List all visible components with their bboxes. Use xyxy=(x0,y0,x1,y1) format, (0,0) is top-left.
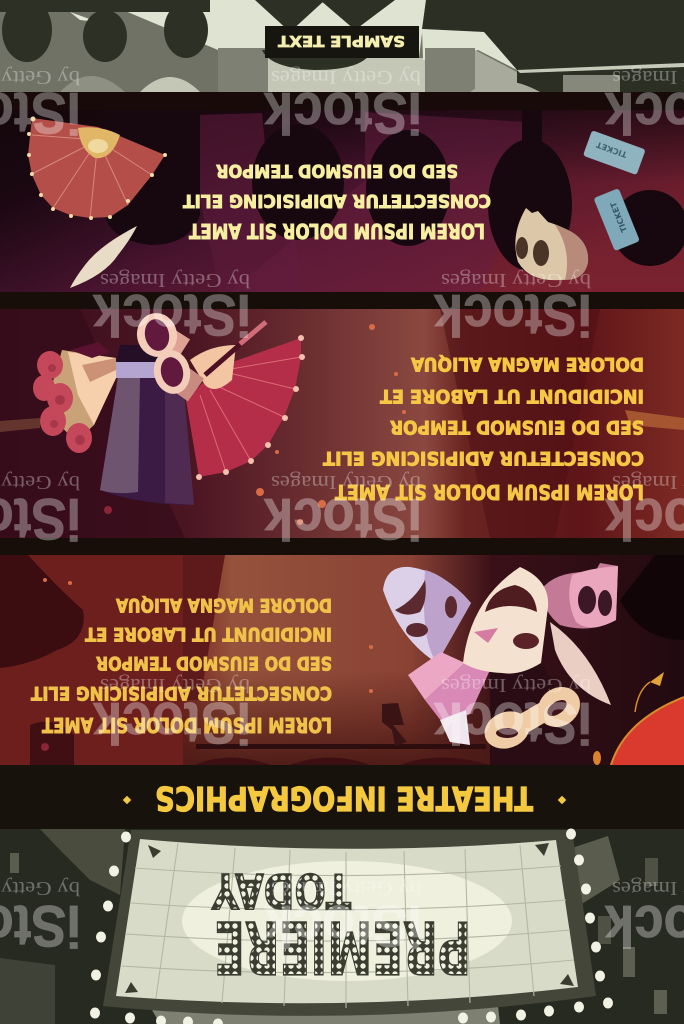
dust particles xyxy=(41,578,373,751)
icon: skull xyxy=(515,208,588,280)
watermark: repeated stock marks: iStock xyxy=(263,80,422,145)
text block: panel one copy: LOREM IPSUM DOLOR SIT AMET xyxy=(189,219,485,243)
icon: feather xyxy=(550,622,611,705)
bulbs around marquee xyxy=(90,828,613,1024)
text block: panel three copy: DOLORE MAGNA ALIQUA xyxy=(116,594,332,616)
sample text label: SAMPLE TEXT xyxy=(277,32,405,50)
icon: ticket 1 xyxy=(583,130,646,175)
icon: red seat xyxy=(593,672,684,765)
text block: panel two copy: CONSECTETUR ADIPISICING ELIT xyxy=(323,447,644,469)
marquee text: premiere: PREMIERE xyxy=(214,905,471,989)
icon: pink skull xyxy=(541,563,618,629)
panel: theatre masks xyxy=(0,555,684,765)
icon: purple cape xyxy=(100,345,194,505)
icon: red fan xyxy=(27,116,167,220)
icon: ticket 2 xyxy=(594,188,640,251)
text block: panel two copy xyxy=(323,353,644,504)
divider band two xyxy=(0,538,684,555)
text block: panel three copy: INCIDIDUNT UT LABORE ET xyxy=(85,623,332,645)
text block: panel three copy: SED DO EIUSMOD TEMPOR xyxy=(96,652,332,674)
dust particles xyxy=(104,324,406,525)
text block: panel one copy: SED DO EIUSMOD TEMPOR xyxy=(216,160,458,181)
watermark: repeated stock marks: by Getty Images xyxy=(271,66,421,88)
silhouettes xyxy=(105,110,684,271)
watermark: repeated stock marks: by Getty Images xyxy=(100,674,250,696)
watermark: repeated stock marks: iStock xyxy=(92,690,251,755)
text block: panel two copy: DOLORE MAGNA ALIQUA xyxy=(411,353,644,375)
text block: panel one copy: CONSECTETUR ADIPISICING ELIT xyxy=(182,190,491,211)
watermark: repeated stock marks: by Getty Images xyxy=(271,471,421,493)
icon: small eye mask xyxy=(479,679,588,755)
watermark: repeated stock marks: by Getty Images xyxy=(271,877,421,899)
silhouettes of audience heads xyxy=(0,0,395,70)
icon: feather xyxy=(70,208,147,288)
icon: sad mask xyxy=(383,567,471,663)
title band xyxy=(0,765,684,829)
watermark: repeated stock marks: iStock xyxy=(433,282,592,347)
icon: ticket 2: TICKET xyxy=(609,200,629,234)
panel: premiere marquee xyxy=(0,828,684,1024)
icon: camera silhouette xyxy=(382,703,407,746)
text block: panel two copy: SED DO EIUSMOD TEMPOR xyxy=(390,416,644,438)
icon: opera glasses xyxy=(133,309,196,397)
marquee text: today: TODAY xyxy=(211,862,351,918)
watermark: repeated stock marks: by Getty Images xyxy=(441,674,591,696)
watermark: repeated stock marks: by Getty Images xyxy=(100,269,250,291)
watermark: repeated stock marks: iStock xyxy=(263,486,422,551)
projection screen xyxy=(116,839,578,1008)
watermark: repeated stock marks: iStock xyxy=(263,893,422,958)
text block: panel two copy: INCIDIDUNT UT LABORE ET xyxy=(380,385,644,407)
icon: paper note xyxy=(408,652,490,745)
sample text label xyxy=(265,26,419,58)
divider band one xyxy=(0,292,684,309)
panel: bouquet, cape and fan xyxy=(0,309,684,538)
marquee frame xyxy=(103,830,596,1016)
watermark: repeated stock marks: iStock xyxy=(433,690,592,755)
watermark: repeated stock marks: iStock xyxy=(92,282,251,347)
icon: fan with handle xyxy=(186,322,305,480)
text block: panel three copy xyxy=(31,594,332,737)
icon: bouquet of roses xyxy=(33,342,116,453)
text block: panel one copy xyxy=(182,160,491,243)
panel: fan, skull and tickets xyxy=(0,92,684,292)
text block: panel two copy: LOREM IPSUM DOLOR SIT AMET xyxy=(335,480,644,504)
top panel: theatre audience xyxy=(0,0,684,92)
icon: comedy mask xyxy=(463,567,548,674)
title band: THEATRE INFOGRAPHICS xyxy=(155,779,533,818)
icon: ticket 1: TICKET xyxy=(595,140,628,159)
watermark: repeated stock marks: by Getty Images xyxy=(441,269,591,291)
